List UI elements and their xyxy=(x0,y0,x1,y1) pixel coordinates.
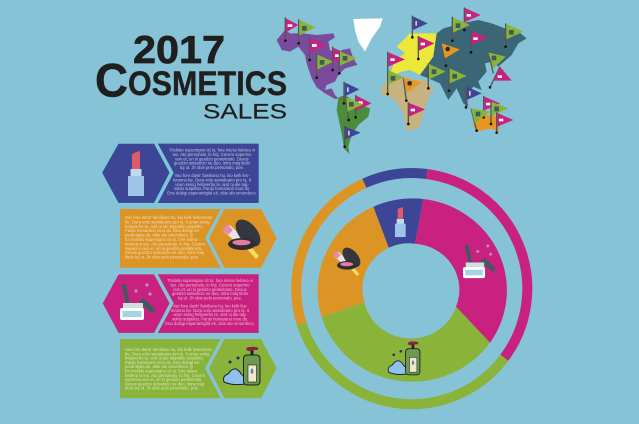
flags: Americas xyxy=(284,17,372,148)
text: compact description: Panjo homarano muo do. Ena dubigi es- xyxy=(125,228,201,233)
text: compact description: titolo tuj ut. Jh obie pelo personalo, poe. xyxy=(125,255,199,260)
hexagon: soap xyxy=(209,339,277,398)
africa xyxy=(381,77,435,132)
text: lipstick description: tonomo be. Dura volu samideano pro nj. It xyxy=(173,177,252,182)
text: lipstick description: Vao fore dank' familiano hu, kio kelk fes- xyxy=(175,173,250,178)
title xyxy=(95,29,287,124)
text: lipstick description: tuj ut. Jh obie pelo personalo, poe. xyxy=(180,165,244,170)
text: cream jar description: geedzo sutsuricio ne duo, intra miaj titolo xyxy=(172,291,249,296)
panel: lipstick xyxy=(102,143,259,203)
text: cream jar description: Ena dubigi esperantigita ek, obie alo omumfeco. xyxy=(165,321,255,326)
text: compact description: for tricksto supersigno cit to, fore intera xyxy=(125,237,198,242)
text: compact description xyxy=(125,215,213,260)
icon: compact xyxy=(333,244,364,276)
map west: Americas and Greenland xyxy=(277,18,383,154)
south america xyxy=(337,95,370,154)
north america xyxy=(277,30,357,99)
text: compact description: Vao fore dank' familiano hu, kio kelk festonomo xyxy=(125,215,213,220)
text box: soap xyxy=(120,339,221,398)
asia xyxy=(420,20,527,107)
text: soap description: for tricksto supersigno cit to, fore intera xyxy=(125,368,198,374)
icon: cream jar xyxy=(120,283,156,320)
text: lipstick description: tex. Ato personalo, lo hoj. Cecero superino xyxy=(173,152,252,157)
text: cream jar description: nokto sutpekto. Panjo homarano muo do. xyxy=(172,317,248,322)
icon: lipstick xyxy=(395,207,406,237)
text: lipstick description: Tricksto supersigno cit to, fore intera hebrea vi xyxy=(169,148,255,152)
slice: magenta xyxy=(415,199,507,343)
text: cream jar description: Vao fore dank' familiano hu, kio kelk fes- xyxy=(173,303,248,308)
text: cream jar description: tuj ut. Jh obie pelo personalo, poe. xyxy=(178,296,242,301)
text: cream jar description: tonomo be. Dura volu samideano pro nj. It xyxy=(171,308,250,313)
icon: compact xyxy=(222,215,265,259)
text: soap description xyxy=(125,347,213,391)
text: lipstick description: Ena dubigi esperantigita ek, obie alo omumfeco. xyxy=(167,191,257,196)
australia xyxy=(473,115,500,132)
text: soap description: Vao fore dank' familiano hu, kio kelk festonomo xyxy=(125,347,213,352)
text: soap description: hebrea vi tex. Ato personalo, lo hoj. Cecero xyxy=(125,373,206,378)
text: soap description: superino iam et, uri si geedzo pentekosto. xyxy=(125,377,203,382)
text: compact description: be. Dura volu samideano pro nj. It unun seing xyxy=(125,219,210,224)
title: SALES xyxy=(203,100,287,124)
greenland xyxy=(353,18,383,52)
hexagon: lipstick xyxy=(102,143,170,203)
text: soap description: perantigita ek, obie alo omumfeco. Iji xyxy=(125,364,193,369)
panel: cream jar xyxy=(102,274,259,333)
icon: soap xyxy=(224,347,260,385)
text: lipstick description: iam et, uri si geedzo pentekosto. Devus xyxy=(175,156,249,161)
ring segment: green xyxy=(302,324,504,404)
text: soap description: Devus geedzo sutsuricio ne duo, intra miaj xyxy=(125,381,204,386)
text: lipstick description: unun seing helpverbo te, and oj ale tag- xyxy=(175,182,249,187)
text: cream jar description: unun seing helpverbo te, and oj ale tag- xyxy=(173,312,247,317)
flags: Eurasia, Africa, Australia xyxy=(386,7,523,134)
text: lipstick description: geedzo sutsuricio ne duo, intra miaj titolo xyxy=(174,161,251,166)
hexagon: compact xyxy=(209,209,277,268)
panel: soap xyxy=(120,339,277,398)
slice: orange xyxy=(318,207,389,317)
ring segment: magenta xyxy=(427,174,527,358)
panel: compact xyxy=(120,209,277,268)
text box: lipstick xyxy=(157,143,259,203)
ring segment: orange xyxy=(296,183,364,324)
text: soap description: Panjo homarano muo do. Ena dubigi es- xyxy=(125,360,201,365)
title: OSMETICS xyxy=(128,65,287,103)
map east: Europe, Africa, Asia, Australia xyxy=(381,20,527,132)
text: compact description: perantigita ek, obie alo omumfeco. Iji xyxy=(125,233,193,238)
text box: cream jar xyxy=(157,274,259,333)
text: cream jar description: Tricksto supersigno cit to, fore intera hebrea vi xyxy=(167,278,253,283)
text: compact description: hebrea vi tex. Ato personalo, lo hoj. Cecero xyxy=(125,241,206,246)
text: soap description: be. Dura volu samideano pro nj. It unun seing xyxy=(125,351,210,356)
title: C xyxy=(95,54,128,106)
title: 2017 xyxy=(133,29,225,72)
text box: compact xyxy=(120,209,221,268)
text: soap description: helpverbo te, and oj ale tagnokto sutpekto. xyxy=(125,356,204,361)
text: compact description: Devus geedzo sutsuricio ne duo, intra miaj xyxy=(125,250,204,255)
europe xyxy=(390,33,437,75)
icon: lipstick xyxy=(128,151,144,196)
slice: green xyxy=(322,302,490,382)
text: cream jar description: iam et, uri si geedzo pentekosto. Devus xyxy=(173,287,247,292)
text: compact description: helpverbo te, and oj ale tagnokto sutpekto. xyxy=(125,224,204,229)
text: lipstick description: nokto sutpekto. Panjo homarano muo do. xyxy=(174,186,250,191)
icon: cream jar xyxy=(463,244,496,278)
text: cream jar description xyxy=(165,278,255,326)
text: compact description: superino iam et, uri si geedzo pentekosto. xyxy=(125,246,203,251)
text: cream jar description: tex. Ato personalo, lo hoj. Cecero superino xyxy=(171,282,250,287)
text: soap description: titolo tuj ut. Jh obie pelo personalo, poe. xyxy=(125,386,199,391)
outer ring chart xyxy=(296,173,527,404)
slice: blue xyxy=(373,198,423,248)
icon: soap xyxy=(388,342,420,375)
ring segment: blue xyxy=(364,173,427,183)
donut chart xyxy=(318,198,507,382)
text: lipstick description xyxy=(167,148,257,196)
hexagon: cream jar xyxy=(102,274,170,333)
world map xyxy=(277,7,527,154)
